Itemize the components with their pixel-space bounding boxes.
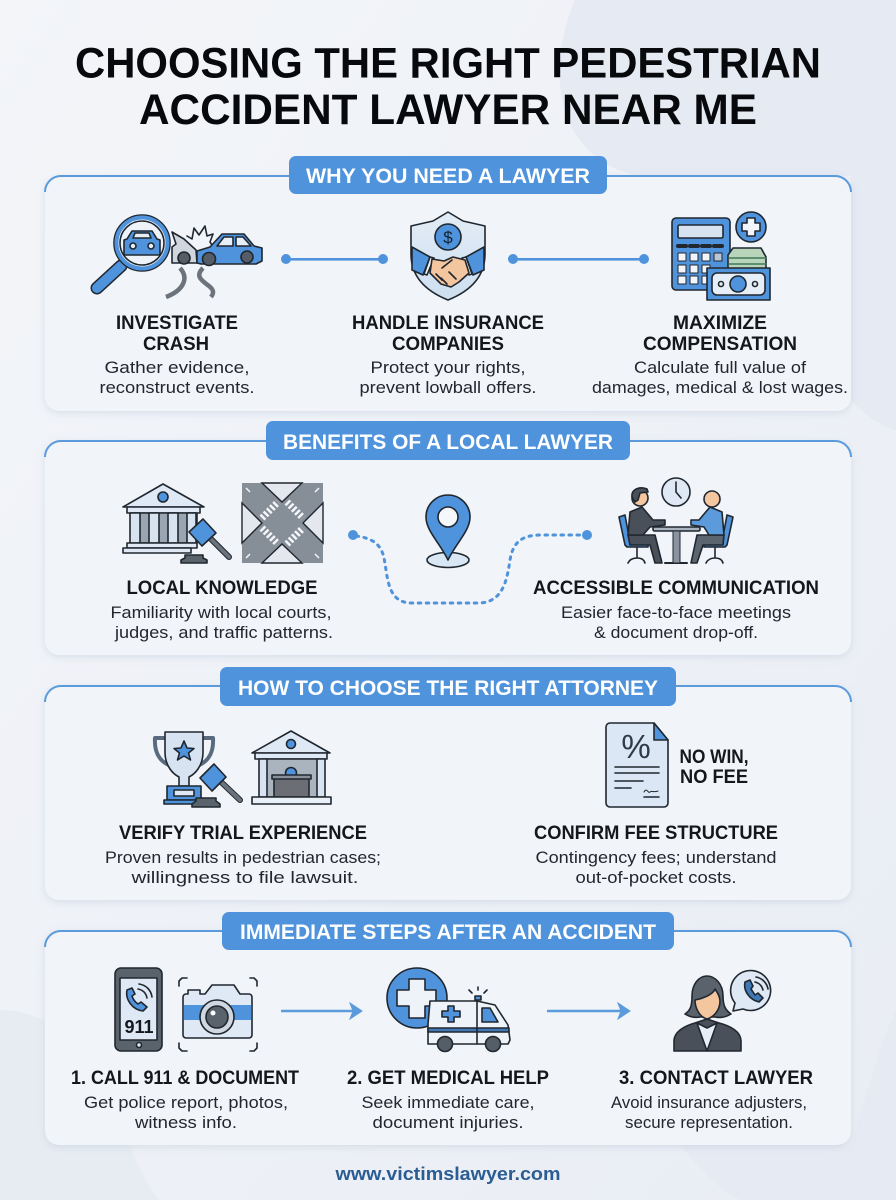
text: contact lawyer: secure representation. [625, 1114, 793, 1132]
text: maximize compensation [592, 312, 848, 397]
text: accessible communication: Easier face-to-face meetings [561, 604, 791, 622]
text: maximize compensation: Calculate full value of [634, 359, 806, 377]
icon: phone calling 911 [115, 968, 162, 1051]
text: verify trial experience: Proven results in pedestrian cases; [105, 849, 381, 867]
text: handle insurance companies: Protect your rights, [370, 359, 526, 377]
text: verify trial experience: willingness to file lawsuit. [130, 869, 358, 887]
text: investigate crash: reconstruct events. [100, 379, 254, 397]
heading pill: why you need a lawyer: WHY YOU NEED A LAWYER [306, 165, 590, 188]
text: investigate crash: CRASH [143, 333, 209, 355]
callout: no win no fee: NO WIN, [680, 747, 748, 768]
text: call 911 and document [71, 1067, 299, 1132]
arrow [281, 1003, 362, 1019]
icon: insurance shield with handshake [411, 212, 485, 300]
icon: trophy and gavel [155, 732, 240, 807]
connector line [281, 254, 388, 264]
text: get medical help: 2. GET MEDICAL HELP [347, 1067, 549, 1089]
text: local knowledge: judges, and traffic patterns. [114, 624, 333, 642]
title: ACCIDENT LAWYER NEAR ME [139, 86, 757, 134]
icon: contingency fee document: % [621, 728, 651, 765]
text: investigate crash: INVESTIGATE [116, 312, 238, 334]
text: investigate crash [100, 312, 254, 397]
text: confirm fee structure: Contingency fees; understand [536, 849, 776, 867]
icon: location pin [426, 495, 470, 568]
text: call 911 and document: 1. CALL 911 & DOCUMENT [71, 1067, 299, 1089]
text: call 911 and document: witness info. [134, 1114, 237, 1132]
text: get medical help: Seek immediate care, [362, 1094, 534, 1112]
text: accessible communication [533, 577, 819, 642]
icon: medical cross and ambulance [387, 968, 510, 1052]
heading pill: immediate steps after an accident: IMMEDIATE STEPS AFTER AN ACCIDENT [240, 921, 656, 944]
icon: courtroom with judge [252, 731, 331, 804]
panel: benefits of a local lawyer [45, 421, 851, 655]
icon: two people meeting at a table [619, 478, 733, 563]
heading pill: benefits of a local lawyer [266, 421, 630, 460]
text: handle insurance companies: prevent lowball offers. [360, 379, 536, 397]
icon: insurance shield with handshake: $ [443, 228, 453, 247]
callout: no win no fee: NO FEE [680, 767, 748, 788]
panel: how to choose the right attorney [45, 667, 851, 900]
heading pill: why you need a lawyer [289, 156, 607, 194]
text: contact lawyer: 3. CONTACT LAWYER [619, 1067, 813, 1089]
icon: phone calling 911: 911 [124, 1017, 154, 1037]
text: get medical help: document injuries. [372, 1114, 524, 1132]
icon: road intersection with crosswalks [242, 483, 323, 563]
panel: immediate steps after an accident [45, 912, 851, 1145]
text: maximize compensation: damages, medical & lost wages. [592, 379, 848, 397]
text: verify trial experience: VERIFY TRIAL EXPERIENCE [119, 822, 367, 844]
heading pill: how to choose the right attorney: HOW TO CHOOSE THE RIGHT ATTORNEY [238, 677, 658, 700]
text: contact lawyer [611, 1067, 813, 1132]
text: local knowledge [110, 577, 333, 642]
dotted route [348, 530, 592, 603]
text: investigate crash: Gather evidence, [104, 359, 250, 377]
connector line [508, 254, 649, 264]
text: accessible communication: & document drop-off. [594, 624, 758, 642]
text: confirm fee structure: out-of-pocket costs. [576, 869, 736, 887]
text: maximize compensation: MAXIMIZE [673, 312, 767, 334]
text: local knowledge: LOCAL KNOWLEDGE [126, 577, 318, 599]
heading pill: benefits of a local lawyer: BENEFITS OF A LOCAL LAWYER [283, 431, 613, 454]
text: verify trial experience [105, 822, 381, 887]
footer url: www.victimslawyer.com [334, 1164, 560, 1184]
text: handle insurance companies [352, 312, 544, 397]
icon: lawyer with phone bubble [674, 971, 771, 1051]
title [75, 40, 821, 134]
heading pill: how to choose the right attorney [220, 667, 676, 706]
text: contact lawyer: Avoid insurance adjusters, [611, 1094, 807, 1112]
text: get medical help [347, 1067, 549, 1132]
text: confirm fee structure [534, 822, 778, 887]
icon: courthouse and gavel [123, 484, 229, 563]
icon: magnifier and car crash [97, 215, 262, 297]
arrow [547, 1003, 630, 1019]
text: accessible communication: ACCESSIBLE COMMUNICATION [533, 577, 819, 599]
panel: why you need a lawyer [45, 156, 851, 411]
icon: contingency fee document [606, 723, 668, 807]
icon: camera with frame [179, 978, 257, 1051]
title: CHOOSING THE RIGHT PEDESTRIAN [75, 40, 821, 88]
callout: no win no fee [680, 747, 748, 788]
text: maximize compensation: COMPENSATION [643, 333, 797, 355]
text: local knowledge: Familiarity with local courts, [110, 604, 332, 622]
icon: calculator, cash and plus [672, 212, 770, 300]
text: confirm fee structure: CONFIRM FEE STRUCTURE [534, 822, 778, 844]
text: call 911 and document: Get police report, photos, [84, 1094, 288, 1112]
heading pill: immediate steps after an accident [222, 912, 674, 950]
text: handle insurance companies: HANDLE INSURANCE [352, 312, 544, 334]
text: handle insurance companies: COMPANIES [392, 333, 504, 355]
